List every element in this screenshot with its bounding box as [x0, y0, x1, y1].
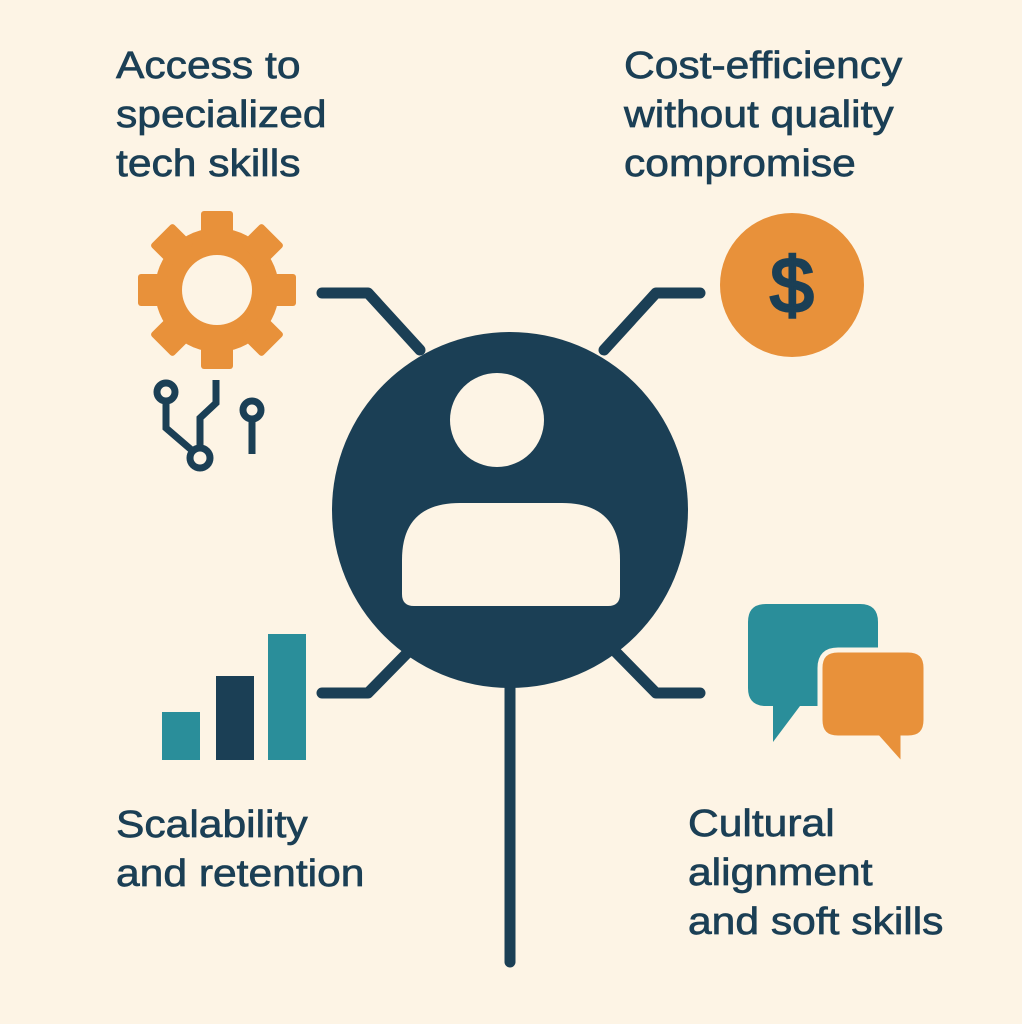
- icon: dollar: [720, 213, 864, 357]
- title: cultural: [688, 803, 943, 943]
- title: scalability: [116, 804, 364, 895]
- title: cultural: alignment: [688, 852, 873, 894]
- title: cost: Cost-efficiency: [624, 45, 902, 87]
- title: cultural: Cultural: [688, 803, 835, 845]
- title: access: [116, 45, 327, 185]
- title: scalability: and retention: [116, 853, 364, 895]
- title: cost: without quality: [624, 94, 894, 136]
- title: access: specialized: [116, 94, 327, 136]
- central person circle: [332, 332, 688, 688]
- title: cost: [623, 45, 903, 185]
- icon: circuit: [157, 380, 261, 468]
- title: cost: compromise: [624, 143, 856, 185]
- icon: gear: [138, 211, 296, 369]
- title: scalability: Scalability: [116, 804, 308, 846]
- title: access: tech skills: [116, 143, 300, 185]
- connectors: [322, 293, 700, 962]
- title: cultural: and soft skills: [688, 901, 943, 943]
- icon: dollar: $: [770, 241, 814, 329]
- icon: speech bubbles: [748, 604, 926, 766]
- bar chart: [162, 634, 306, 760]
- title: access: Access to: [116, 45, 301, 87]
